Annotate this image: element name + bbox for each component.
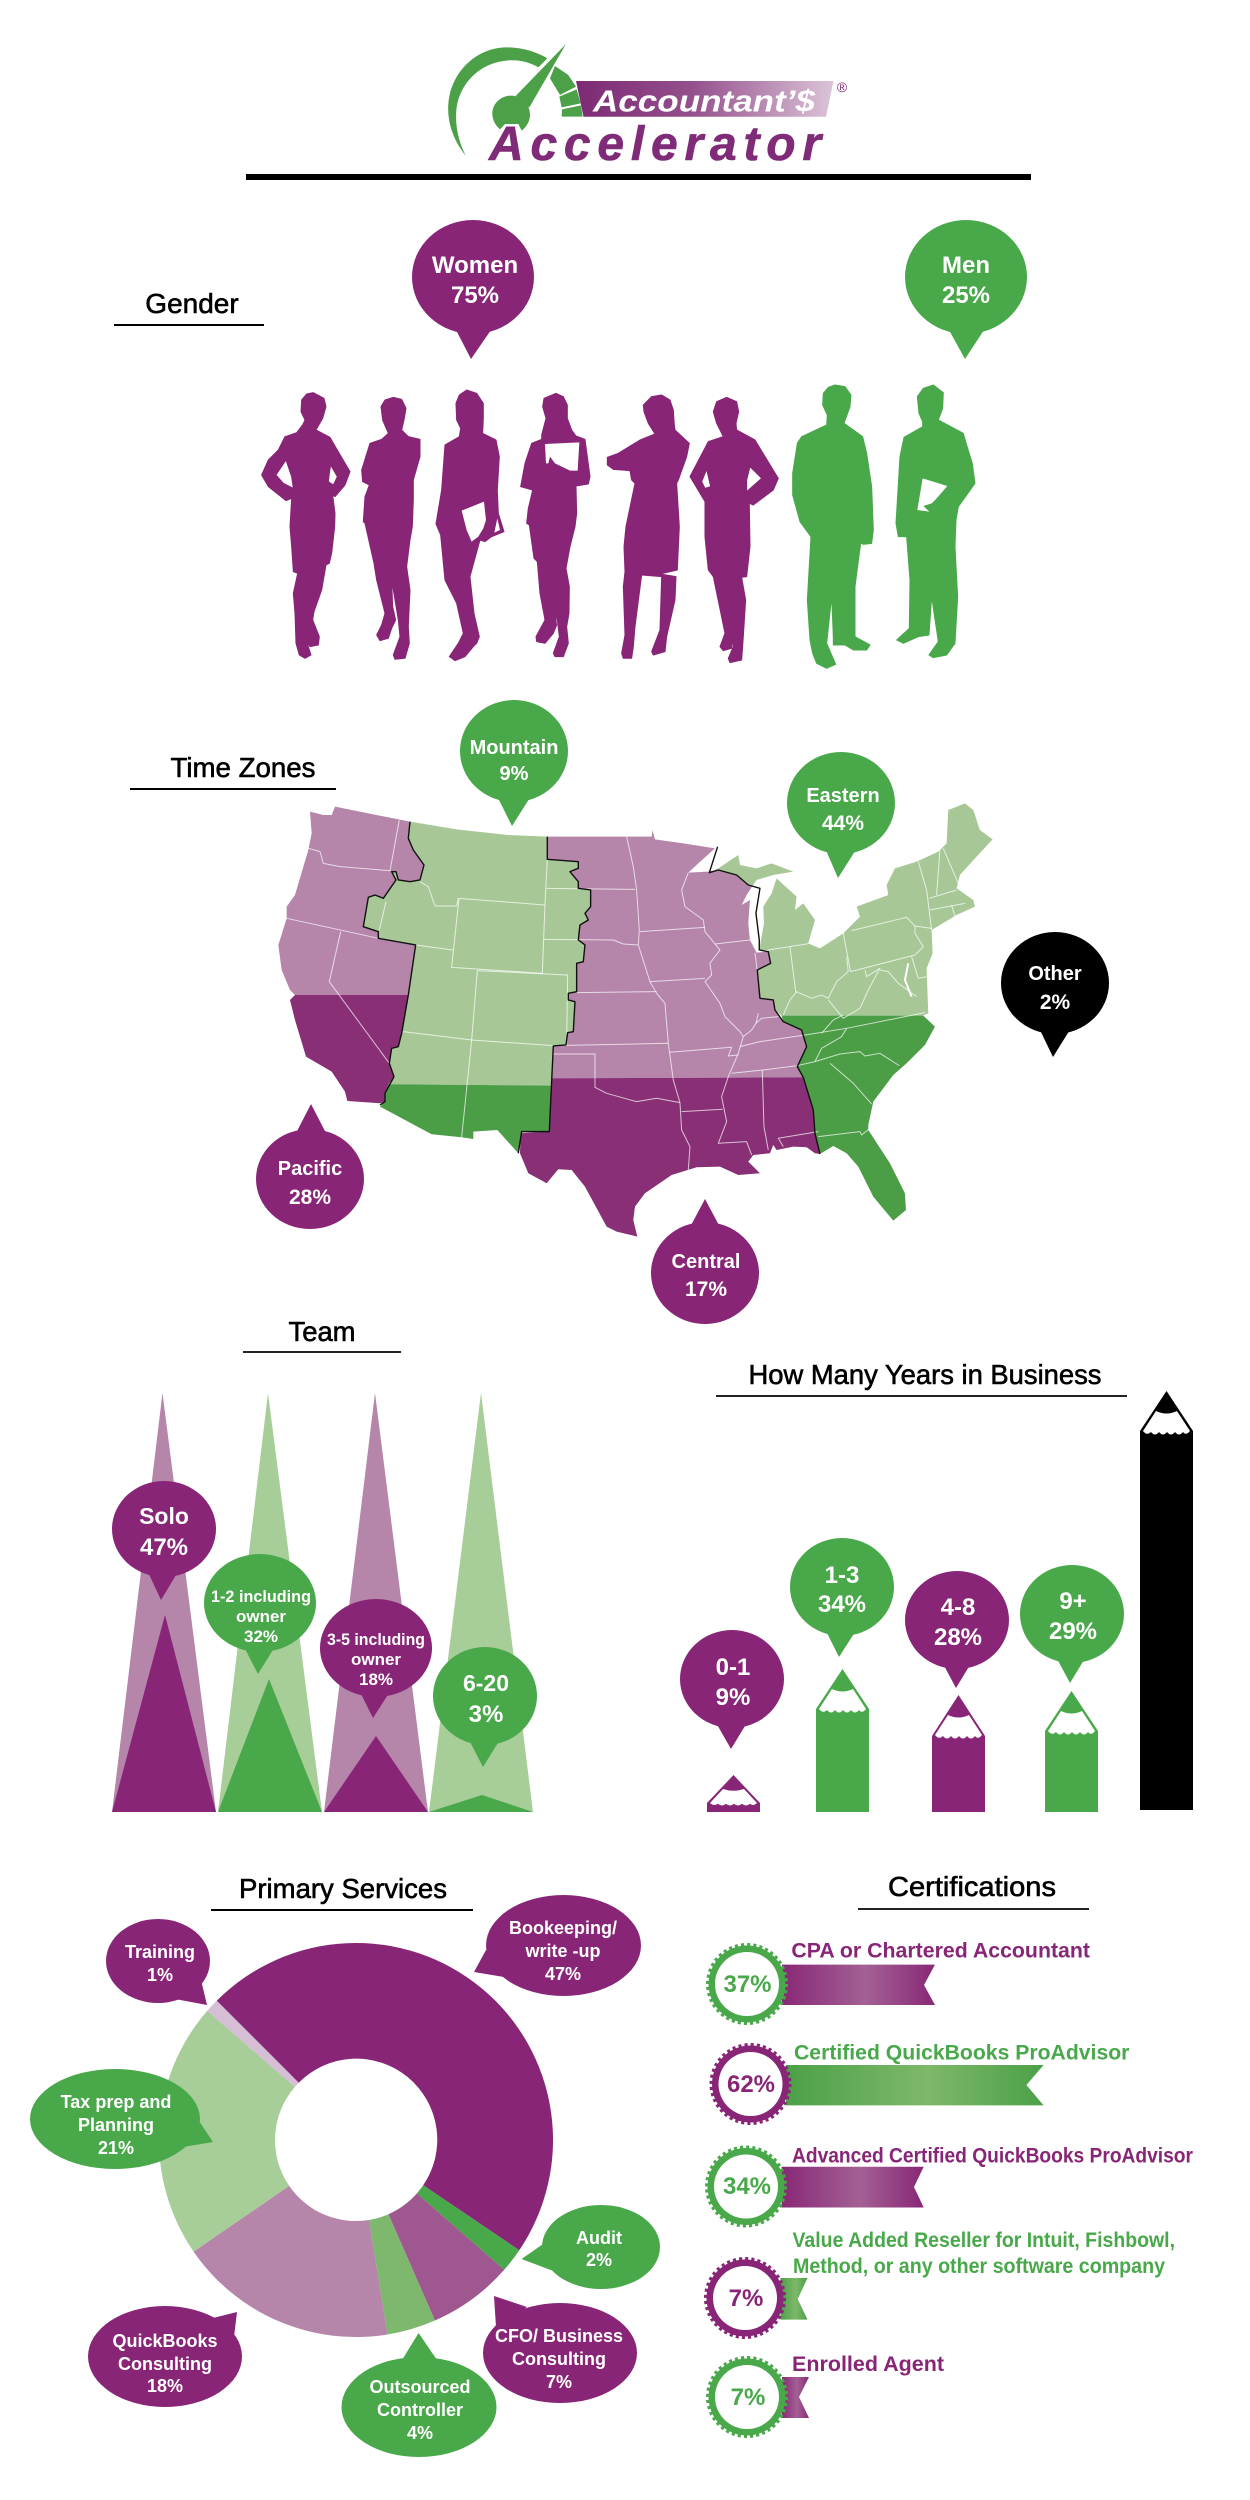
bar: 3-5 including owner — [324, 1393, 428, 1812]
callout: Eastern 44% — [787, 752, 895, 878]
callout: 1-2 including owner 32% — [204, 1554, 316, 1674]
callout: Tax prep and Planning 21%: Tax prep and — [61, 2092, 171, 2112]
label: Value Added Reseller for Intuit, Fishbowl, — [792, 2229, 1175, 2252]
panel: time zones — [130, 700, 1109, 1324]
ribbon — [782, 2377, 809, 2418]
heading: Primary Services: Primary Services — [239, 1873, 447, 1904]
panel: primary services — [30, 1873, 660, 2457]
callout: 0-1 9%: 0-1 — [716, 1654, 750, 1681]
callout: Outsourced Controller 4%: Controller — [377, 2400, 463, 2420]
row: Enrolled Agent 7% — [708, 2353, 944, 2436]
callout: Training 1% — [106, 1919, 210, 2005]
callout: 1-2 including owner 32%: owner — [236, 1607, 286, 1626]
callout: Other 2%: Other — [1028, 963, 1082, 985]
heading: How Many Years in Business: How Many Years in Business — [748, 1359, 1102, 1390]
label: Certified QuickBooks ProAdvisor — [794, 2042, 1129, 2065]
bar: Solo — [112, 1393, 216, 1812]
time zone boundaries — [363, 822, 820, 1154]
callout: Tax prep and Planning 21%: 21% — [98, 2138, 134, 2158]
callout: Audit 2%: Audit — [576, 2228, 622, 2248]
ribbon — [780, 2278, 808, 2320]
slice: QuickBooks Consulting 18% — [194, 2186, 388, 2337]
callout: Outsourced Controller 4%: Outsourced — [369, 2377, 471, 2397]
map: United States time zones — [278, 803, 993, 1237]
callout: Bookkeeping 47% — [474, 1895, 641, 1996]
label — [792, 2229, 1175, 2278]
callout: Other 2%: 2% — [1040, 991, 1070, 1014]
callout: 1-2 including owner 32%: 1-2 including — [211, 1587, 311, 1606]
pencil: 1-3 — [816, 1669, 869, 1812]
badge — [706, 2258, 784, 2338]
region: Central dark — [520, 1077, 820, 1237]
callout: Women 75%: Women — [432, 252, 518, 279]
bar: 6-20 — [429, 1393, 533, 1812]
row: Advanced Certified QuickBooks ProAdvisor 34% — [706, 2144, 1193, 2226]
callout: Men 25%: Men — [942, 252, 990, 279]
row: CPA or Chartered Accountant 37% — [708, 1940, 1090, 2024]
callout: Central 17%: Central — [672, 1251, 740, 1273]
callout: 0-1 9% — [680, 1630, 784, 1749]
callout: 6-20 3% — [433, 1647, 537, 1767]
ribbon — [782, 2167, 924, 2208]
woman 6 — [690, 397, 778, 663]
ribbon — [782, 1965, 935, 2005]
callout: QuickBooks Consulting 18%: 18% — [147, 2376, 183, 2396]
callout: Bookkeeping 47%: write -up — [524, 1941, 601, 1961]
badge: 7% — [731, 2384, 765, 2411]
woman 3 with folder — [436, 390, 504, 661]
logo word: Accountant's: Accountant’$ — [592, 84, 816, 118]
woman 1 — [262, 393, 350, 658]
callout: 4-8 28%: 28% — [934, 1624, 982, 1651]
callout: 9+ 29%: 9+ — [1059, 1588, 1087, 1615]
callout: 3-5 including owner 18%: owner — [351, 1650, 401, 1669]
region: Pacific light — [278, 807, 424, 995]
logo word: Accelerator: Accelerator — [488, 118, 823, 171]
woman 5 — [607, 395, 689, 658]
label: Enrolled Agent — [792, 2353, 944, 2376]
badge: 34% — [723, 2173, 771, 2200]
callout: Women 75% — [412, 220, 534, 359]
callout: Outsourced Controller 4%: 4% — [407, 2423, 433, 2443]
callout: CFO Business Consulting 7%: Consulting — [512, 2349, 606, 2369]
figures: people silhouettes — [262, 385, 975, 668]
pencil: black reference — [1140, 1391, 1193, 1810]
callout: Training 1%: Training — [125, 1942, 195, 1962]
callout: Central 17% — [651, 1199, 759, 1324]
man 1 — [793, 385, 873, 668]
badge — [706, 2147, 786, 2226]
slice: Audit 2% — [417, 2185, 519, 2270]
panel: team — [112, 1316, 537, 1812]
callout: 6-20 3%: 6-20 — [463, 1670, 509, 1696]
callout: Mountain 9%: Mountain — [470, 737, 558, 759]
callout: Pacific 28% — [256, 1104, 364, 1229]
logo: Accountant's Accelerator — [448, 44, 848, 171]
woman 2 — [362, 397, 420, 659]
pencil: 4-8 — [932, 1695, 985, 1812]
region: Mountain dark — [380, 1084, 551, 1153]
state borders — [287, 820, 965, 1170]
heading: Certifications: Certifications — [888, 1871, 1056, 1902]
callout: Outsourced Controller 4% — [342, 2333, 496, 2457]
callout: 9+ 29% — [1020, 1565, 1124, 1683]
ribbon — [786, 2065, 1044, 2105]
heading: Team: Team — [288, 1316, 356, 1347]
man 2 with folder — [896, 385, 975, 658]
registered mark: ® — [837, 79, 848, 95]
chart: team triangles — [112, 1393, 533, 1812]
row: Value Added Reseller 7% — [706, 2229, 1175, 2338]
callout: 1-3 34% — [790, 1538, 894, 1657]
callout: Pacific 28%: Pacific — [278, 1158, 342, 1180]
chart: services donut — [159, 1943, 553, 2337]
callout: Tax prep and Planning 21%: Planning — [78, 2115, 154, 2135]
callout: Eastern 44%: 44% — [822, 812, 864, 835]
callout: Tax prep and Planning 21% — [30, 2069, 213, 2169]
callout: Mountain 9% — [460, 700, 568, 826]
callout: Bookkeeping 47%: Bookeeping/ — [509, 1918, 617, 1938]
callout: 1-3 34%: 1-3 — [825, 1562, 859, 1589]
region: Mountain light — [363, 822, 591, 1086]
callout: 3-5 including owner 18%: 3-5 including — [327, 1630, 425, 1649]
pencil: 0-1 — [707, 1775, 760, 1812]
slice: Tax prep 21% — [159, 2011, 295, 2252]
callout: Bookkeeping 47%: 47% — [545, 1964, 581, 1984]
label: Advanced Certified QuickBooks ProAdvisor — [792, 2144, 1193, 2168]
badge: 62% — [727, 2071, 775, 2098]
callout: 1-3 34%: 34% — [818, 1591, 866, 1618]
callout: 3-5 including owner 18% — [320, 1599, 432, 1718]
panel: gender — [114, 220, 1027, 668]
callout: Eastern 44%: Eastern — [806, 785, 880, 807]
pencil: 9+ — [1045, 1691, 1098, 1812]
badge — [711, 2044, 790, 2124]
badge — [708, 1944, 786, 2024]
region: Eastern light — [709, 803, 993, 1016]
heading: Gender: Gender — [145, 288, 239, 319]
callout: 6-20 3%: 3% — [469, 1701, 503, 1728]
callout: Audit 2% — [522, 2205, 660, 2289]
slice: Outsourced Controller 4% — [369, 2214, 435, 2334]
callout: Solo 47%: Solo — [139, 1503, 189, 1529]
callout: Audit 2%: 2% — [586, 2250, 612, 2270]
badge — [708, 2358, 786, 2436]
label: CPA or Chartered Accountant — [791, 1940, 1090, 1962]
row: Certified QuickBooks ProAdvisor 62% — [711, 2042, 1129, 2124]
callout: 4-8 28% — [905, 1571, 1009, 1688]
icon: speedometer gauge — [448, 44, 583, 156]
callout: Other 2% — [1001, 932, 1109, 1057]
callout: 3-5 including owner 18%: 18% — [359, 1670, 393, 1689]
callout: CFO Business Consulting 7% — [483, 2296, 637, 2403]
region: Central light — [547, 830, 807, 1078]
callout: QuickBooks Consulting 18%: QuickBooks — [112, 2331, 218, 2351]
callout: Training 1%: 1% — [147, 1965, 173, 1985]
callout: Women 75%: 75% — [451, 282, 499, 309]
callout: Mountain 9%: 9% — [500, 763, 529, 785]
callout: Solo 47% — [112, 1481, 216, 1600]
callout: 0-1 9%: 9% — [716, 1684, 750, 1711]
heading: Time Zones: Time Zones — [170, 752, 316, 783]
callout: 4-8 28%: 4-8 — [941, 1594, 975, 1621]
region: Pacific dark — [290, 995, 408, 1103]
slice: Bookkeeping 47% — [217, 1943, 553, 2250]
callout: 1-2 including owner 32%: 32% — [244, 1627, 278, 1646]
callout: Central 17%: 17% — [685, 1278, 727, 1301]
callout: 9+ 29%: 29% — [1049, 1618, 1097, 1645]
region: Eastern dark — [782, 1016, 935, 1221]
slice: Training 1% — [207, 2001, 299, 2087]
badge: 37% — [723, 1971, 772, 1998]
slice: CFO 7% — [388, 2193, 504, 2320]
callout: Men 25%: 25% — [942, 282, 990, 309]
callout: Solo 47%: 47% — [140, 1534, 188, 1561]
panel: certifications — [706, 1871, 1193, 2436]
label: Method, or any other software company — [793, 2255, 1165, 2278]
callout: Men 25% — [905, 220, 1027, 359]
callout: Pacific 28%: 28% — [289, 1186, 331, 1209]
callout: CFO Business Consulting 7%: CFO/ Business — [495, 2326, 623, 2346]
panel: years in business — [680, 1359, 1193, 1812]
callout: QuickBooks Consulting 18% — [88, 2306, 242, 2407]
logo ribbon — [576, 81, 834, 117]
bar: 1-2 including owner — [218, 1393, 322, 1812]
callout: QuickBooks Consulting 18%: Consulting — [118, 2354, 212, 2374]
woman 4 with folder — [521, 393, 590, 657]
badge: 7% — [729, 2285, 763, 2312]
callout: CFO Business Consulting 7%: 7% — [546, 2372, 572, 2392]
